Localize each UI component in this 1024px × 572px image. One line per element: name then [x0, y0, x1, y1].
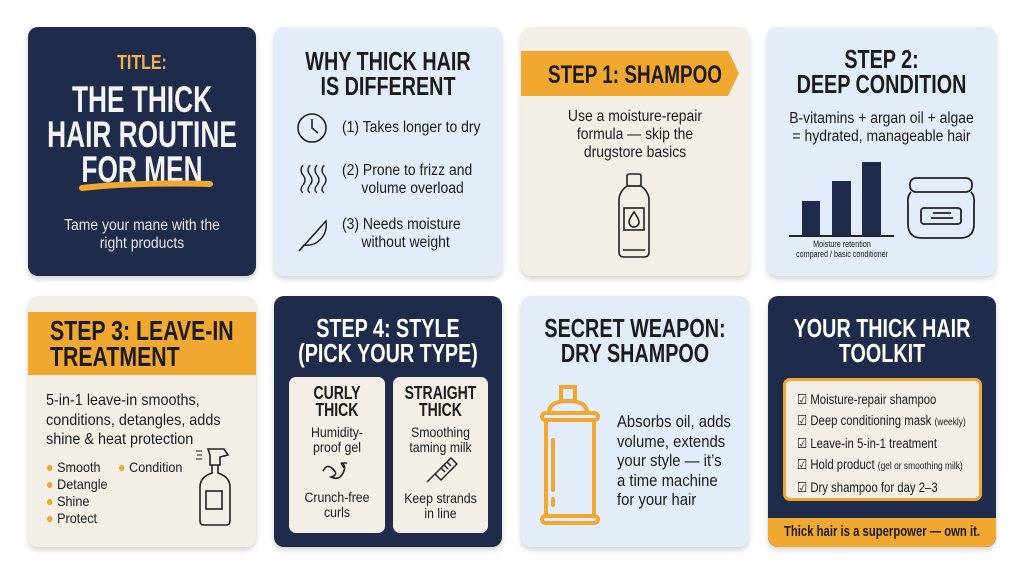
bullet list: ● Protect	[46, 510, 97, 526]
body text: Use a moisture-repair	[568, 108, 702, 125]
body text: your style — it’s	[617, 452, 722, 470]
sub-card: curly: Humidity-	[311, 424, 363, 440]
item 3: (3) Needs moisture	[342, 216, 461, 233]
bullet list: ● Detangle	[46, 476, 108, 492]
bar chart: Moisture retention	[813, 239, 871, 249]
label: TITLE: TITLE:	[117, 52, 167, 74]
panel: toolkit	[768, 296, 996, 547]
panel: title card	[28, 27, 256, 276]
heading: IS DIFFERENT	[320, 71, 456, 101]
panel: step 3 leave-in	[28, 296, 256, 547]
sub-card: straight: taming milk	[409, 439, 472, 455]
sub-card: curly: curls	[324, 504, 350, 520]
body text	[568, 108, 702, 161]
heading: STEP 2:	[844, 44, 919, 74]
sub-card: straight: in line	[424, 505, 457, 521]
main title: FOR MEN	[81, 149, 203, 190]
heading	[50, 315, 234, 372]
item 1	[297, 113, 481, 143]
footer text: Thick hair is a superpower — own it.	[784, 524, 980, 540]
panel: step 4 style	[274, 296, 502, 547]
sub-card: straight: Keep strands	[404, 490, 477, 506]
icon: spray can	[540, 385, 600, 525]
bar chart	[789, 162, 894, 259]
item 3: without weight	[361, 234, 450, 251]
body text	[46, 392, 221, 448]
bullet list: ● Shine	[46, 493, 89, 509]
body text: formula — skip the	[577, 126, 693, 143]
sub-card: curly: THICK	[316, 400, 358, 420]
header band	[28, 312, 256, 375]
body text: Absorbs oil, adds	[617, 413, 731, 431]
heading	[797, 44, 966, 99]
heading	[794, 313, 970, 368]
heading: STEP 4: STYLE	[316, 313, 460, 343]
heading	[305, 46, 471, 101]
footer banner	[768, 518, 996, 547]
icon: spray bottle	[196, 448, 231, 526]
main title: HAIR ROUTINE	[47, 114, 237, 155]
underline brush	[79, 180, 213, 191]
bar chart: compared / basic conditioner	[796, 249, 888, 259]
sub-card: straight: STRAIGHT	[405, 383, 476, 403]
icon: jar	[907, 177, 976, 239]
heading: (PICK YOUR TYPE)	[298, 338, 478, 368]
subtitle	[64, 217, 220, 252]
item 3	[298, 216, 461, 252]
sub-card: straight: Smoothing	[411, 424, 470, 440]
heading: STEP 3: LEAVE-IN	[50, 315, 234, 346]
item 1: (1) Takes longer to dry	[342, 119, 481, 136]
heading	[544, 313, 726, 368]
body text	[789, 110, 974, 145]
icon: frizz waves	[300, 164, 327, 194]
body text: conditions, detangles, adds	[46, 412, 221, 428]
sub-card: curly	[289, 377, 385, 533]
panel: why thick hair is different	[274, 27, 502, 276]
sub-card: curly: proof gel	[313, 439, 361, 455]
body text: = hydrated, manageable hair	[792, 128, 970, 145]
body text: a time machine	[617, 472, 718, 490]
checklist: ☑ Leave-in 5-in-1 treatment	[797, 436, 937, 451]
heading: YOUR THICK HAIR	[794, 313, 970, 343]
panel: secret weapon dry shampoo	[521, 296, 749, 547]
checklist: ☑ Hold product (gel or smoothing milk)	[797, 457, 963, 472]
body text: B-vitamins + argan oil + algae	[789, 110, 974, 127]
body text: drugstore basics	[584, 144, 686, 161]
body text: 5-in-1 leave-in smooths,	[46, 392, 200, 409]
icon: feather	[298, 219, 328, 252]
body text	[617, 413, 731, 509]
heading: TOOLKIT	[839, 338, 925, 368]
subtitle: right products	[100, 235, 184, 252]
panel: step 2 deep condition	[767, 27, 996, 276]
subtitle: Tame your mane with the	[64, 217, 220, 234]
heading: WHY THICK HAIR	[305, 46, 471, 76]
checklist: ☑ Dry shampoo for day 2–3	[797, 480, 938, 495]
item 2: volume overload	[361, 180, 464, 197]
icon: clock	[297, 113, 327, 143]
heading: TREATMENT	[50, 341, 180, 372]
body text: for your hair	[617, 491, 696, 509]
icon: shampoo bottle	[618, 173, 650, 258]
item 2	[300, 162, 472, 197]
heading: DRY SHAMPOO	[561, 338, 709, 368]
heading	[298, 313, 478, 368]
icon: comb	[426, 457, 458, 482]
body text: shine & heat protection	[46, 431, 193, 448]
body text: volume, extends	[617, 432, 725, 450]
main title	[47, 79, 237, 190]
banner: step 1	[521, 51, 739, 96]
sub-card: curly: CURLY	[313, 383, 361, 403]
checklist: ☑ Deep conditioning mask (weekly)	[797, 413, 966, 428]
icon: curl	[322, 462, 347, 480]
bullet list: ● Smooth ● Condition	[46, 459, 182, 475]
bullet list	[46, 459, 182, 526]
sub-card: curly: Crunch-free	[304, 489, 370, 505]
sub-card: straight	[393, 377, 488, 533]
heading: DEEP CONDITION	[797, 69, 966, 99]
checklist	[783, 378, 982, 501]
panel: step 1 shampoo	[521, 27, 749, 276]
item 2: (2) Prone to frizz and	[342, 162, 472, 179]
checklist: ☑ Moisture-repair shampoo	[797, 392, 936, 407]
heading: SECRET WEAPON:	[544, 313, 726, 343]
main title: THE THICK	[72, 79, 212, 120]
sub-card: straight: THICK	[419, 400, 462, 420]
